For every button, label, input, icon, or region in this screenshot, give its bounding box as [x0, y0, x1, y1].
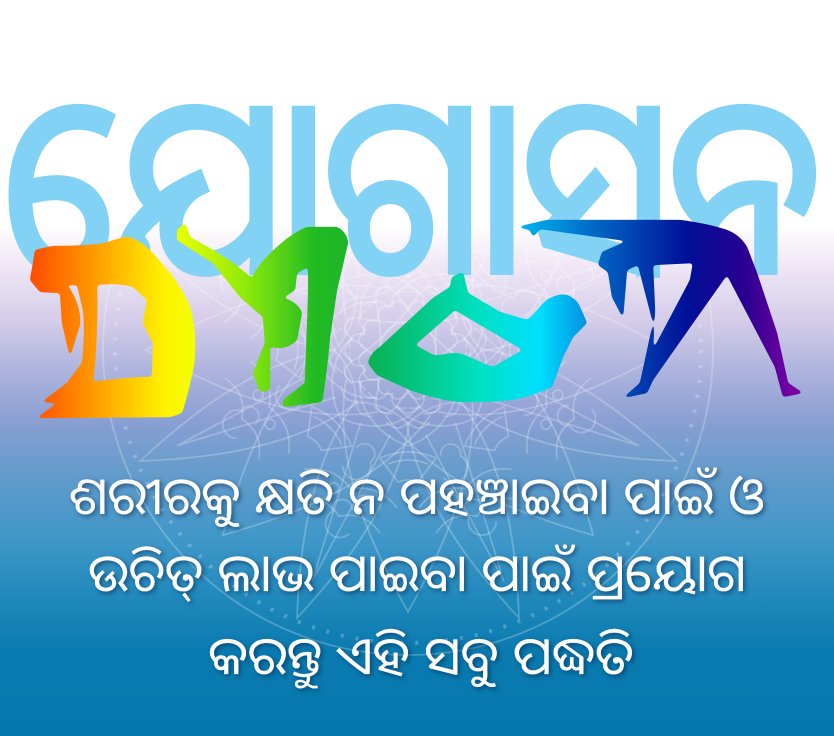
figure: bow pose	[368, 272, 587, 402]
text line 3: କରନ୍ତୁ ଏହି ସବୁ ପଦ୍ଧତି	[208, 627, 634, 686]
figure: forward bend	[177, 223, 348, 407]
title: ଯୋଗାସନ	[4, 49, 819, 323]
text line 2: ଉଚିତ୍ ଲାଭ ପାଇବା ପାଇଁ ପ୍ରୟୋଗ	[88, 545, 746, 603]
figure: triangle bend	[517, 220, 803, 398]
body text	[69, 467, 768, 692]
figure: backbend	[30, 237, 195, 418]
text line 1: ଶରୀରକୁ କ୍ଷତି ନ ପହଞ୍ଚାଇବା ପାଇଁ ଓ	[69, 468, 765, 526]
